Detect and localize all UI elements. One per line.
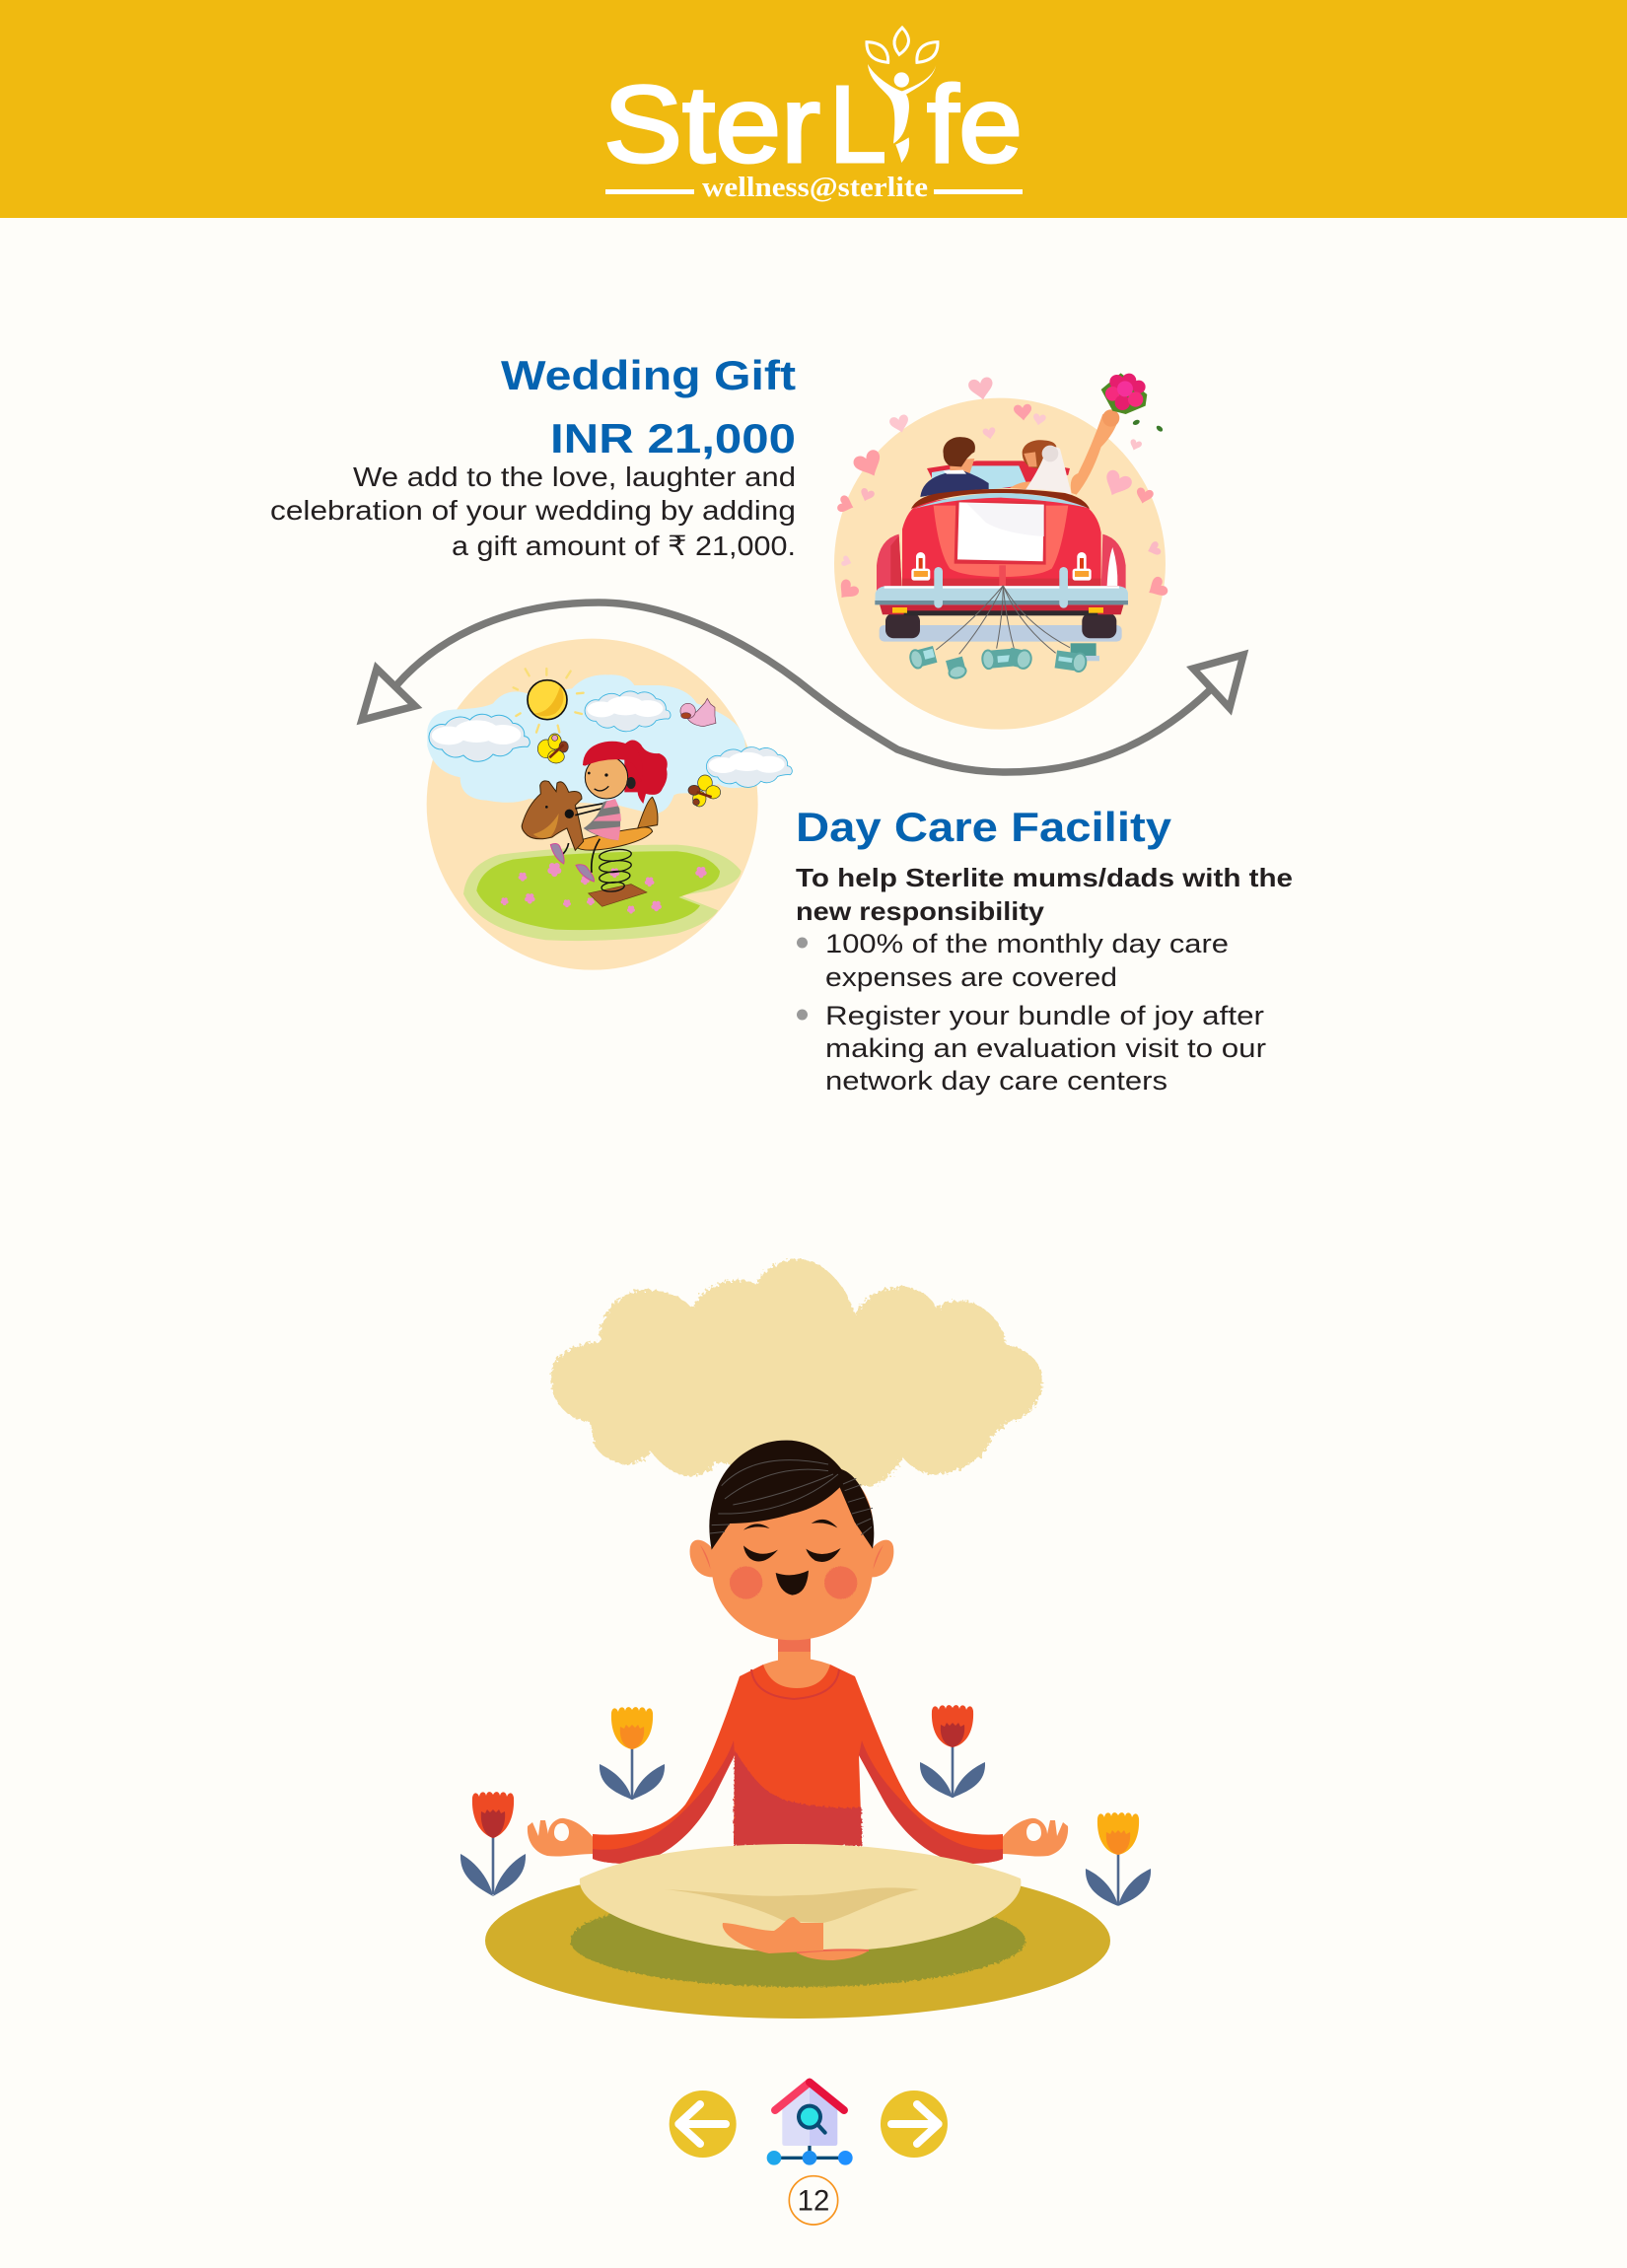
logo wordmark: SterLife: Ster [603,64,820,185]
girl [550,740,668,882]
neck [778,1632,811,1671]
strings and tin cans [908,586,1099,679]
hair [709,1441,874,1550]
sky [427,674,758,814]
panel: day care facility text [796,804,1293,1096]
sun [514,669,584,733]
cheeks [730,1566,857,1599]
spring and base [589,848,647,906]
ears [690,1540,893,1577]
bullet: registration: network day care centers [825,1066,1167,1096]
home search icon [767,2083,853,2165]
subheading: help for parents: new responsibility [796,896,1045,926]
clouds [429,691,792,787]
groom [920,437,989,497]
illustration: meditating man [460,1441,1151,2019]
logo tagline: wellness@sterlite [702,172,928,203]
panel: wedding gift text [270,352,796,561]
next button [881,2091,948,2158]
illustration: wedding car in circle [834,373,1169,730]
logo tagline [605,172,1023,203]
tail lights [911,552,1092,581]
foot [723,1917,869,1960]
logo wordmark: SterLife: L [829,64,886,185]
logo wordmark: SterLife [603,64,1023,185]
bullet: day care expenses: 100% of the monthly day care [825,929,1229,958]
mouth [776,1571,809,1595]
header band with logo [0,0,1627,218]
windshield [927,461,1070,490]
bumper [875,567,1128,615]
heading: INR amount: INR 21,000 [550,415,796,461]
body text: wedding gift description: celebration of your wedding by adding [270,495,796,526]
page number [789,2176,838,2225]
eyes and brows [743,1520,841,1562]
logo wordmark: SterLife: fe [927,64,1023,185]
thought cloud [551,1259,1042,1486]
grass [463,845,742,941]
bullet: registration: making an evaluation visit to our [825,1033,1266,1063]
head [690,1441,893,1640]
hands [528,1818,1068,1857]
subheading: help for parents: To help Sterlite mums/dads with the [796,863,1293,892]
mat [485,1863,1110,2019]
logo icon: figure with leaves [867,28,938,163]
bullet: registration [797,1001,1266,1096]
body text: wedding gift description: a gift amount of ₹ 21,000. [452,531,796,561]
tulips [460,1705,1151,1906]
navigation footer [670,2083,948,2225]
curved double-headed arrow [362,602,1243,772]
bird [680,698,716,727]
heading: Wedding Gift: Wedding Gift [501,352,796,398]
bullet: day care expenses: expenses are covered [825,962,1117,992]
body text: wedding gift description [270,461,796,561]
bouquet [1101,373,1164,433]
illustration: child on spring horse in circle [427,639,792,970]
body text: wedding gift description: We add to the love, laughter and [353,461,796,492]
flowers [501,863,707,914]
butterflies [537,734,721,807]
ground shadow and wheels [880,613,1122,642]
crossed legs [580,1844,1021,1952]
bullet: day care expenses [797,929,1229,992]
sweater [593,1659,1003,1864]
previous button [670,2091,737,2158]
heading: Day Care Facility: Day Care Facility [796,804,1172,850]
bullet: registration: Register your bundle of joy after [825,1001,1264,1030]
bride [1010,409,1119,495]
hearts [834,377,1169,604]
subheading: help for parents [796,863,1293,926]
car body [877,489,1126,594]
page number: 12 [798,2185,829,2218]
face [712,1456,873,1640]
horse [522,781,658,850]
